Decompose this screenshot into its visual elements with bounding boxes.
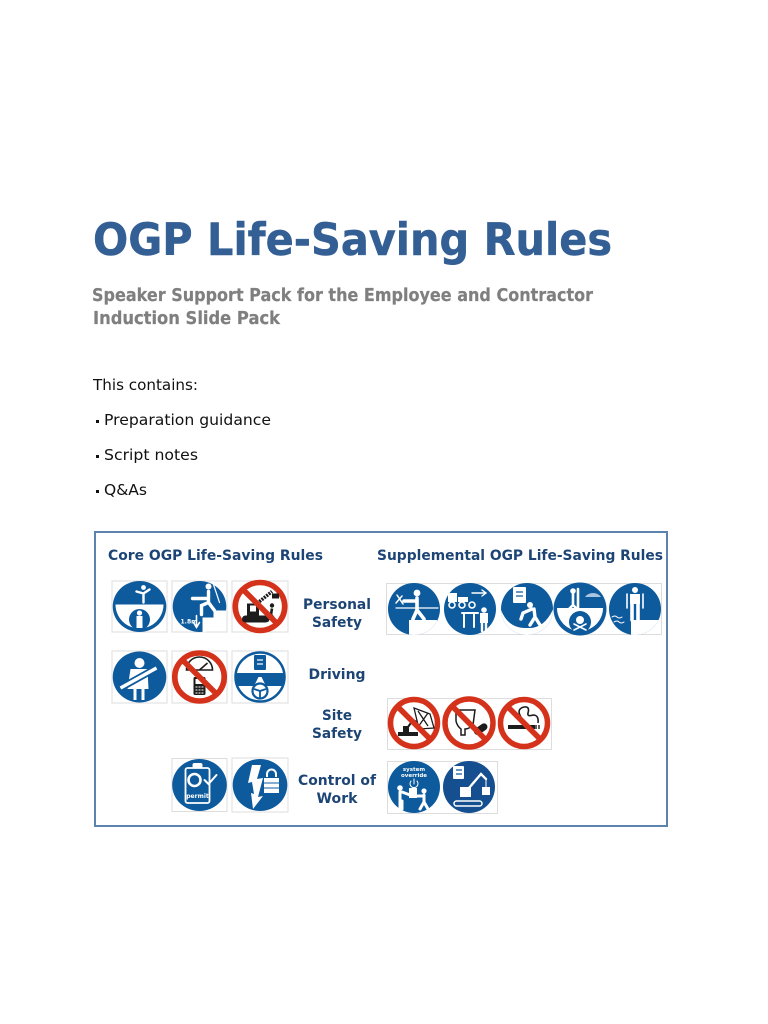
contents list: Q&As xyxy=(104,481,147,499)
label: driving: Driving xyxy=(308,667,366,683)
subtitle xyxy=(92,286,593,329)
icon: working at height: 1.8m xyxy=(180,618,197,626)
title: OGP Life-Saving Rules xyxy=(93,215,612,266)
icon group: supplemental personal safety xyxy=(386,582,662,639)
subtitle: Speaker Support Pack for the Employee and Contractor xyxy=(92,286,593,306)
icon: work permit: permit xyxy=(186,793,209,800)
contents list xyxy=(92,376,271,499)
contents list: This contains: xyxy=(92,376,198,394)
heading: supplemental rules: Supplemental OGP Life-Saving Rules xyxy=(377,548,663,564)
icon: excavation xyxy=(501,583,553,635)
label: control of work xyxy=(298,773,377,807)
contents list: Script notes xyxy=(104,446,198,464)
icon: bypassing safety rail xyxy=(388,583,440,636)
label: site safety: Site xyxy=(322,708,352,724)
icon: lifting operations xyxy=(443,761,495,813)
label: site safety xyxy=(312,708,363,742)
label: personal safety xyxy=(303,597,371,631)
icon: no alcohol or drugs xyxy=(445,699,493,747)
contents list: Preparation guidance xyxy=(104,411,271,429)
icon: working over water xyxy=(609,583,662,636)
icon: no phone while driving xyxy=(172,651,227,703)
icon: moving vehicle and barrier xyxy=(444,583,496,635)
icon: working at height xyxy=(172,581,227,632)
label: site safety: Safety xyxy=(312,726,363,742)
icon group: supplemental control of work xyxy=(388,761,498,814)
icon: journey management xyxy=(232,651,288,703)
icon: seat belt xyxy=(112,651,167,703)
icon group: supplemental site safety xyxy=(388,698,552,750)
label: personal safety: Safety xyxy=(312,615,363,631)
label: control of work: Control of xyxy=(298,773,377,789)
icon: work permit xyxy=(172,758,227,812)
icon: system override: override xyxy=(401,773,427,779)
icon: system override: system xyxy=(403,767,425,773)
icon: no smoking xyxy=(500,700,548,746)
label: personal safety: Personal xyxy=(303,597,371,613)
subtitle: Induction Slide Pack xyxy=(93,309,280,329)
icon: no work near power lines xyxy=(390,700,438,746)
heading: core rules: Core OGP Life-Saving Rules xyxy=(108,548,323,564)
icon: system override xyxy=(388,761,440,813)
panel: rules overview xyxy=(95,532,667,826)
icon: confined space xyxy=(112,581,167,632)
icon: no walking under load xyxy=(232,581,288,632)
icon: gas test xyxy=(554,582,606,636)
label: control of work: Work xyxy=(316,791,358,807)
icon: energy isolation xyxy=(232,758,288,812)
